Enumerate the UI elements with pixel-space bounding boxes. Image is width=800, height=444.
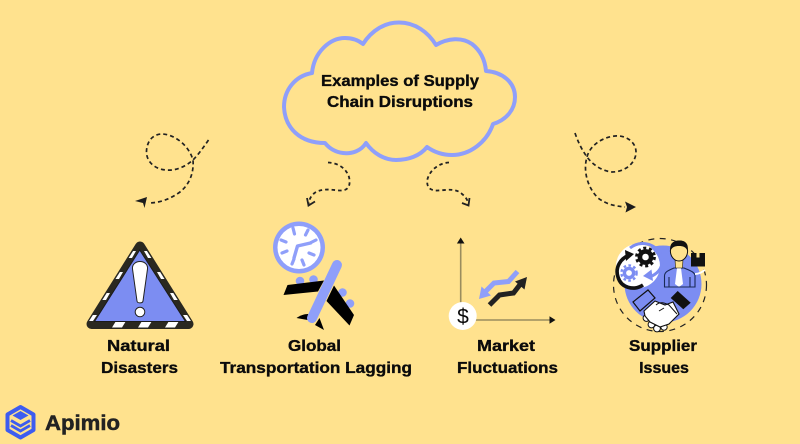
plane engines xyxy=(296,275,354,308)
triangle blue face xyxy=(94,250,186,322)
exclamation mark xyxy=(132,262,148,303)
label: market fluctuations: Fluctuations xyxy=(457,360,558,377)
arrow: loop to natural disasters xyxy=(135,134,208,208)
dashed ring xyxy=(614,238,706,332)
gears group xyxy=(616,244,662,288)
label: market fluctuations: Market xyxy=(477,338,536,355)
clock xyxy=(273,222,325,274)
label: global transportation lagging: Global xyxy=(288,338,341,355)
cloud heading xyxy=(284,22,515,160)
label: natural disasters: Disasters xyxy=(101,360,178,377)
cloud title: Chain Disruptions xyxy=(327,94,473,111)
icon: warning triangle xyxy=(80,246,200,328)
arrow: loop to supplier issues xyxy=(575,133,636,212)
handshake xyxy=(633,290,691,332)
supplier person xyxy=(664,240,695,287)
icon: clock and plane xyxy=(273,222,354,330)
hazard stripes xyxy=(89,251,191,328)
black rising arrow xyxy=(490,277,527,305)
triangle outer border xyxy=(92,246,188,324)
label: global transportation lagging: Transportation Lagging xyxy=(220,360,412,377)
logo xyxy=(8,407,120,438)
label: natural disasters: Natural xyxy=(107,338,170,355)
arrow: curve to market fluctuations xyxy=(427,162,470,206)
dollar sign: $ xyxy=(457,306,469,328)
plane wings and tail xyxy=(284,280,354,330)
blue disc xyxy=(624,246,702,322)
package box xyxy=(691,253,705,274)
plane fuselage xyxy=(312,265,337,318)
logo wordmark: Apimio xyxy=(45,412,120,435)
icon: market chart xyxy=(449,238,556,330)
chart axes xyxy=(461,243,550,320)
icon: supplier xyxy=(614,238,706,332)
dollar circle xyxy=(449,302,477,330)
arrow: curve to global transportation xyxy=(307,162,350,206)
label: supplier issues: Supplier xyxy=(629,338,697,355)
logo mark xyxy=(8,407,34,438)
blue falling arrow xyxy=(479,272,518,299)
label: supplier issues: Issues xyxy=(639,360,689,377)
cloud title: Examples of Supply xyxy=(321,73,479,90)
cloud outline xyxy=(284,22,515,160)
